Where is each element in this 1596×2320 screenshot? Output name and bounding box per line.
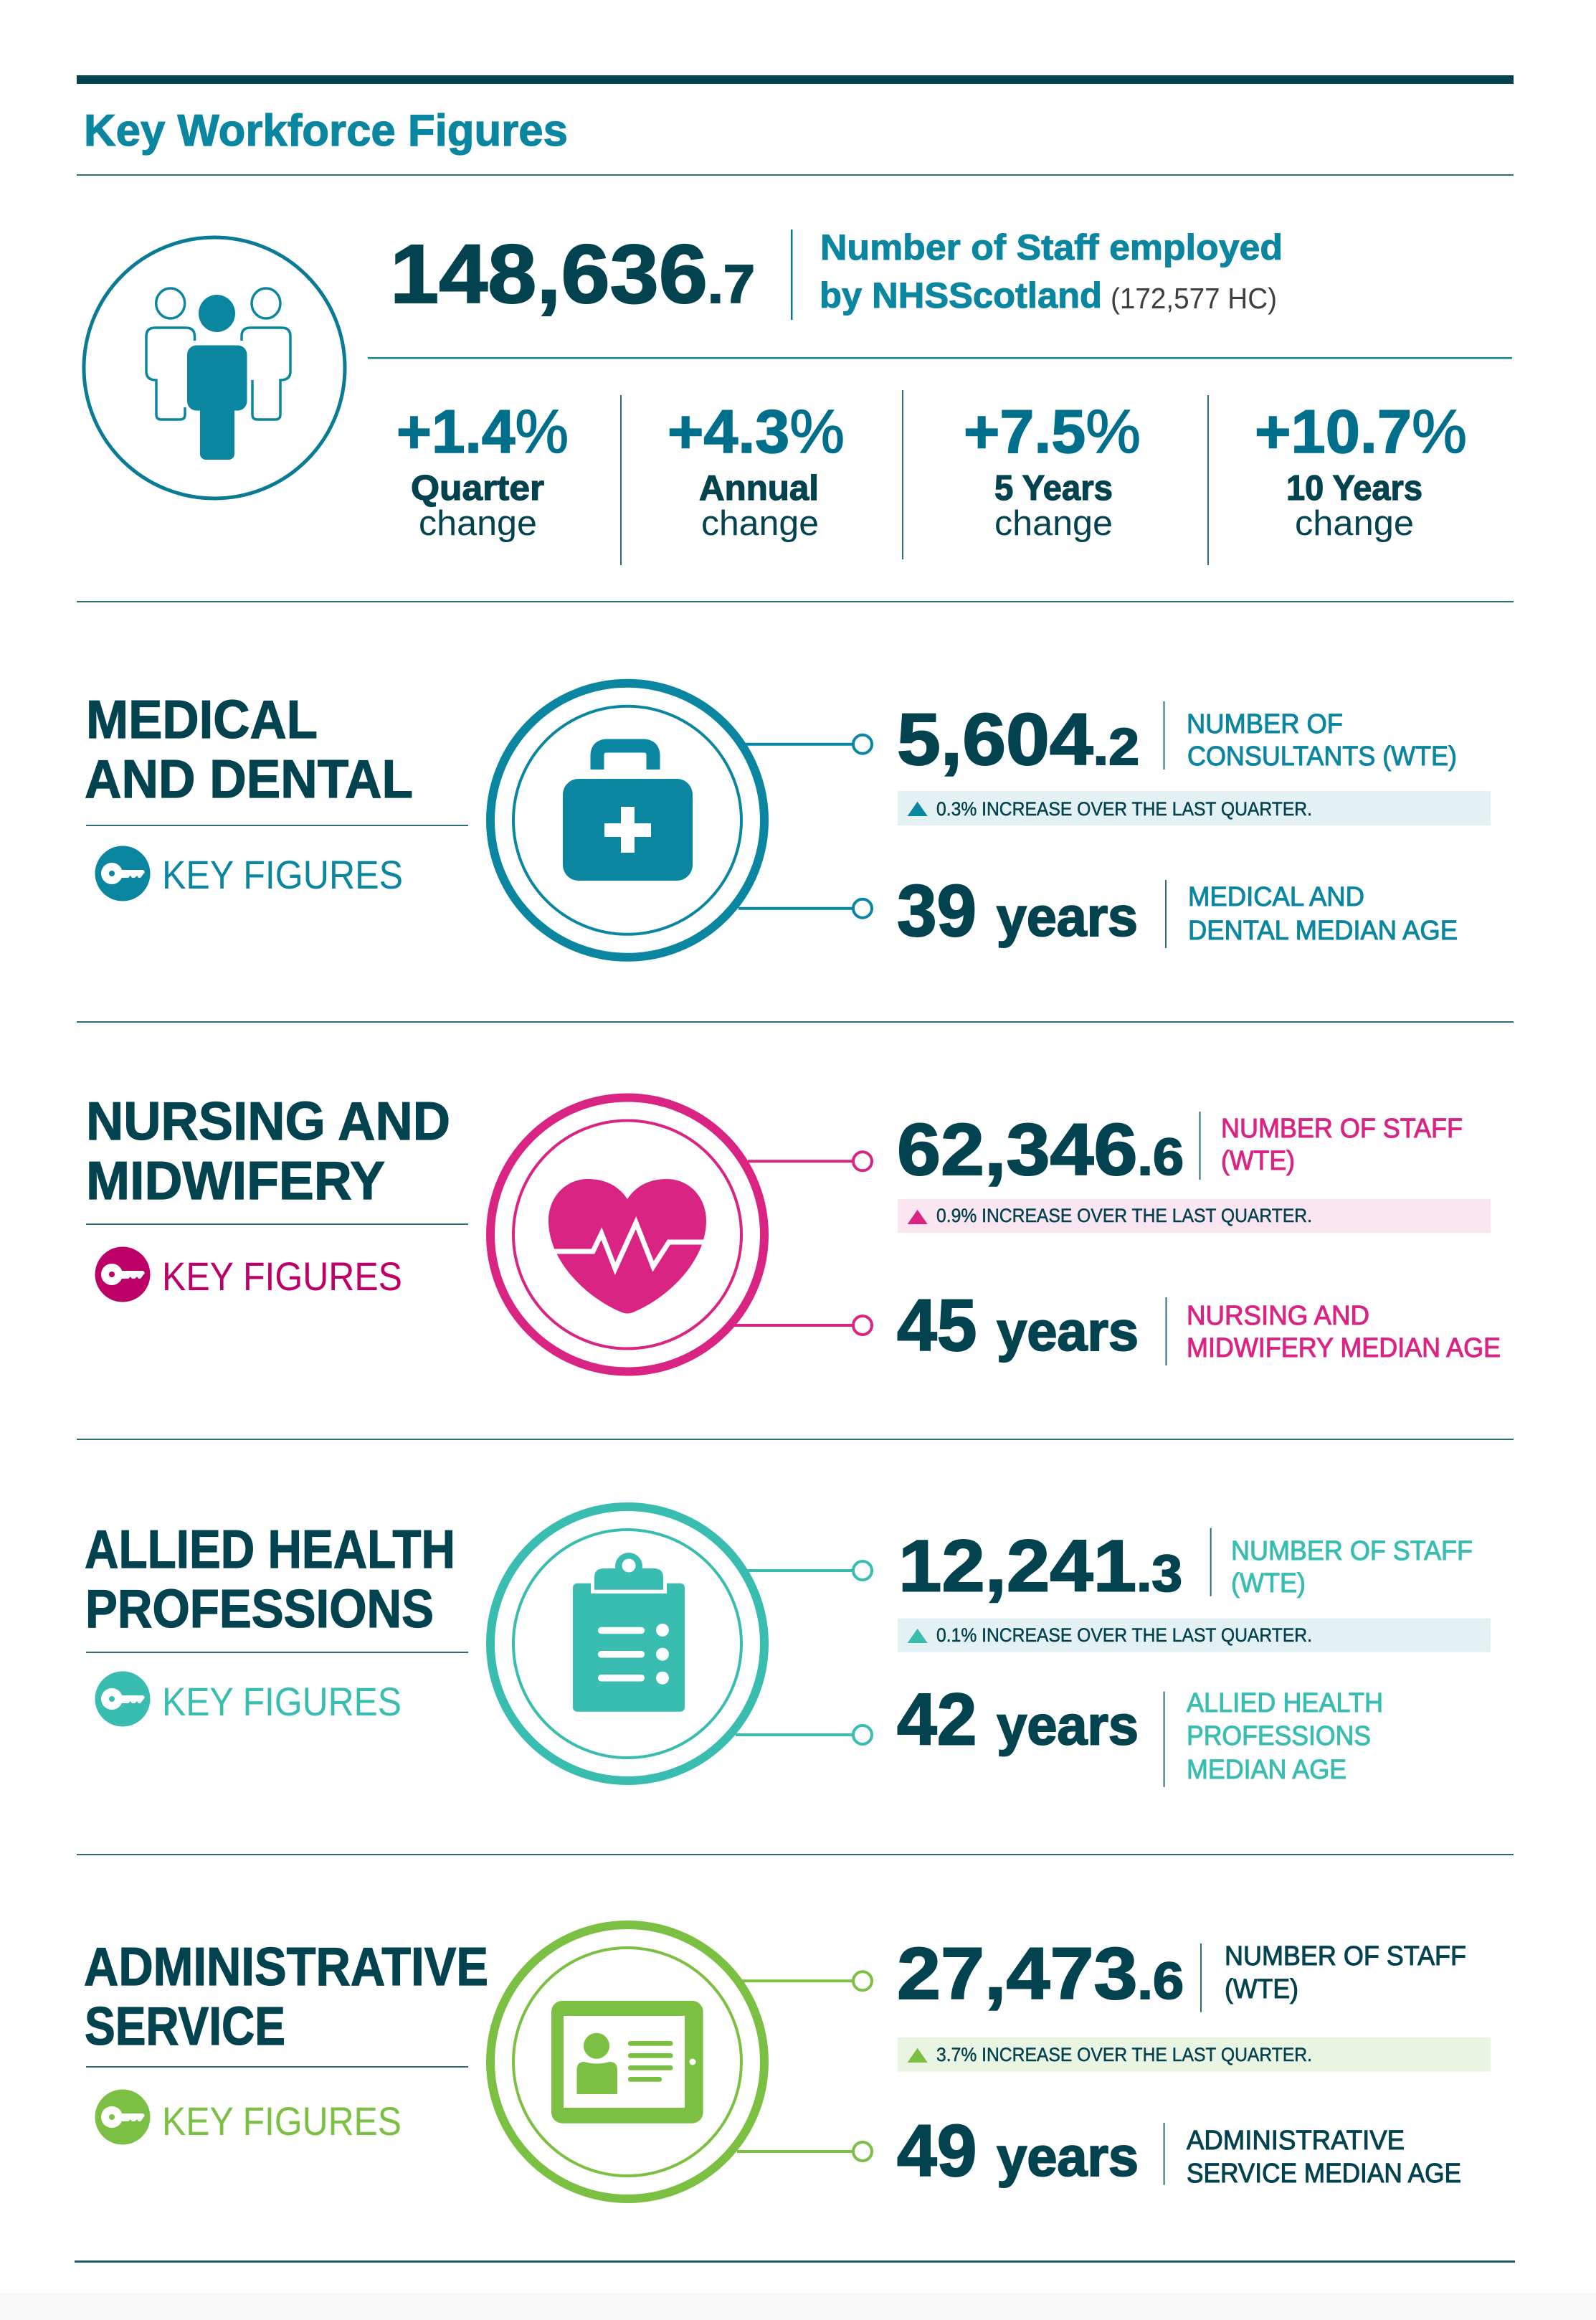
quarterly change band — [898, 1199, 1491, 1233]
staff figure: 12,241 .3 — [898, 1525, 1182, 1607]
staff label: (WTE) — [1221, 1145, 1295, 1175]
stat: quarter change: Quarter — [411, 469, 544, 508]
staff figure: 62,346 .6 — [897, 1109, 1184, 1190]
icon: key — [95, 1671, 151, 1727]
connectors — [734, 1152, 872, 1335]
icon: key — [95, 846, 151, 901]
median age label: MEDICAL AND — [1188, 881, 1364, 912]
heading: medical and dental — [85, 689, 413, 809]
median age label — [1187, 1300, 1501, 1363]
median age label — [1187, 1687, 1383, 1784]
median age label — [1187, 2125, 1461, 2188]
stat: 5 years change: 5 Years — [994, 469, 1113, 508]
staff label: NUMBER OF — [1187, 709, 1343, 739]
icon: tablet ID card — [490, 1925, 764, 2199]
icon: group of staff — [84, 237, 345, 498]
heading: nursing and midwifery: NURSING AND — [86, 1091, 450, 1151]
median age label: MIDWIFERY MEDIAN AGE — [1187, 1332, 1501, 1363]
quarterly change band: 0.3% INCREASE OVER THE LAST QUARTER. — [936, 798, 1312, 820]
stat: 5 years change — [964, 398, 1141, 543]
staff label — [1231, 1535, 1473, 1598]
connectors — [736, 1561, 872, 1744]
heading: administrative service: ADMINISTRATIVE — [84, 1936, 488, 1997]
heading: nursing and midwifery: MIDWIFERY — [86, 1150, 385, 1211]
staff label: (WTE) — [1231, 1568, 1306, 1598]
total staff number: 148,636 .7 — [390, 227, 755, 321]
quarterly change band: 0.1% INCREASE OVER THE LAST QUARTER. — [936, 1624, 1312, 1646]
key figures label: KEY FIGURES — [162, 1679, 402, 1724]
title: Key Workforce Figures — [84, 106, 568, 156]
quarterly change band: 3.7% INCREASE OVER THE LAST QUARTER. — [936, 2044, 1312, 2065]
quarterly change band — [898, 791, 1491, 825]
icon: key — [95, 2090, 151, 2144]
heading: allied health professions: ALLIED HEALTH — [85, 1519, 455, 1579]
median age figure: 42 years — [897, 1679, 1139, 1761]
median age label: SERVICE MEDIAN AGE — [1187, 2158, 1461, 2188]
key figures label: KEY FIGURES — [162, 852, 403, 897]
stat: 10 years change — [1255, 398, 1467, 543]
stat: annual change: +4.3% — [668, 398, 845, 466]
divider and total staff label — [791, 227, 1283, 320]
heading: medical and dental: AND DENTAL — [85, 749, 413, 809]
divider and total staff label: Number of Staff employed — [820, 227, 1283, 267]
panel: allied health professions — [85, 1507, 1491, 1787]
heading: nursing and midwifery — [86, 1091, 450, 1211]
stat: 10 years change: change — [1295, 504, 1414, 543]
quarterly change band: 0.9% INCREASE OVER THE LAST QUARTER. — [936, 1205, 1312, 1226]
stat: annual change — [668, 398, 845, 543]
staff label — [1225, 1941, 1466, 2004]
median age label: ADMINISTRATIVE — [1187, 2125, 1405, 2155]
stat: 5 years change: change — [994, 504, 1113, 543]
staff label: NUMBER OF STAFF — [1221, 1113, 1463, 1143]
divider and total staff label: by NHSScotland — [820, 275, 1102, 316]
staff figure: 5,604 .2 — [897, 699, 1139, 780]
median age label — [1188, 881, 1458, 945]
staff label — [1187, 709, 1457, 771]
heading: administrative service: SERVICE — [85, 1996, 285, 2056]
stat: quarter change — [396, 398, 569, 543]
panel: medical and dental — [85, 683, 1491, 957]
median age label: PROFESSIONS — [1187, 1720, 1371, 1751]
staff label — [1221, 1113, 1463, 1175]
divider and total staff label: (172,577 HC) — [1111, 282, 1277, 315]
median age label: DENTAL MEDIAN AGE — [1188, 915, 1458, 945]
median age label: NURSING AND — [1187, 1300, 1369, 1330]
median age figure: 39 years — [897, 870, 1138, 952]
median age label: ALLIED HEALTH — [1187, 1687, 1383, 1718]
staff figure: 27,473 .6 — [897, 1933, 1184, 2014]
median age figure: 49 years — [897, 2110, 1139, 2192]
stat: 10 years change: +10.7% — [1255, 398, 1467, 466]
stat: quarter change: change — [419, 504, 537, 543]
staff label: (WTE) — [1225, 1974, 1298, 2004]
panel: administrative service — [84, 1925, 1491, 2199]
connectors — [737, 1971, 872, 2161]
stat: quarter change: +1.4% — [396, 398, 569, 466]
key figures label: KEY FIGURES — [162, 2098, 402, 2144]
connectors — [738, 735, 872, 918]
staff label: NUMBER OF STAFF — [1225, 1941, 1466, 1971]
heading: allied health professions — [85, 1519, 455, 1639]
key figures label: KEY FIGURES — [162, 1254, 402, 1299]
heading: medical and dental: MEDICAL — [86, 689, 318, 749]
stat: 10 years change: 10 Years — [1286, 469, 1422, 508]
quarterly change band — [898, 2037, 1491, 2072]
stat: annual change: change — [701, 504, 819, 543]
staff label: CONSULTANTS (WTE) — [1187, 741, 1457, 771]
staff label: NUMBER OF STAFF — [1231, 1535, 1473, 1566]
heading: administrative service — [84, 1936, 488, 2056]
icon: key — [95, 1246, 151, 1302]
median age label: MEDIAN AGE — [1187, 1754, 1346, 1784]
stat: 5 years change: +7.5% — [964, 398, 1141, 466]
median age figure: 45 years — [897, 1284, 1139, 1366]
heading: allied health professions: PROFESSIONS — [85, 1578, 434, 1639]
quarterly change band — [898, 1619, 1491, 1652]
icon: heart — [490, 1097, 764, 1371]
stat: annual change: Annual — [699, 469, 819, 508]
icon: clipboard — [490, 1507, 764, 1781]
icon: medical bag — [490, 683, 764, 957]
panel: nursing and midwifery — [86, 1091, 1501, 1371]
